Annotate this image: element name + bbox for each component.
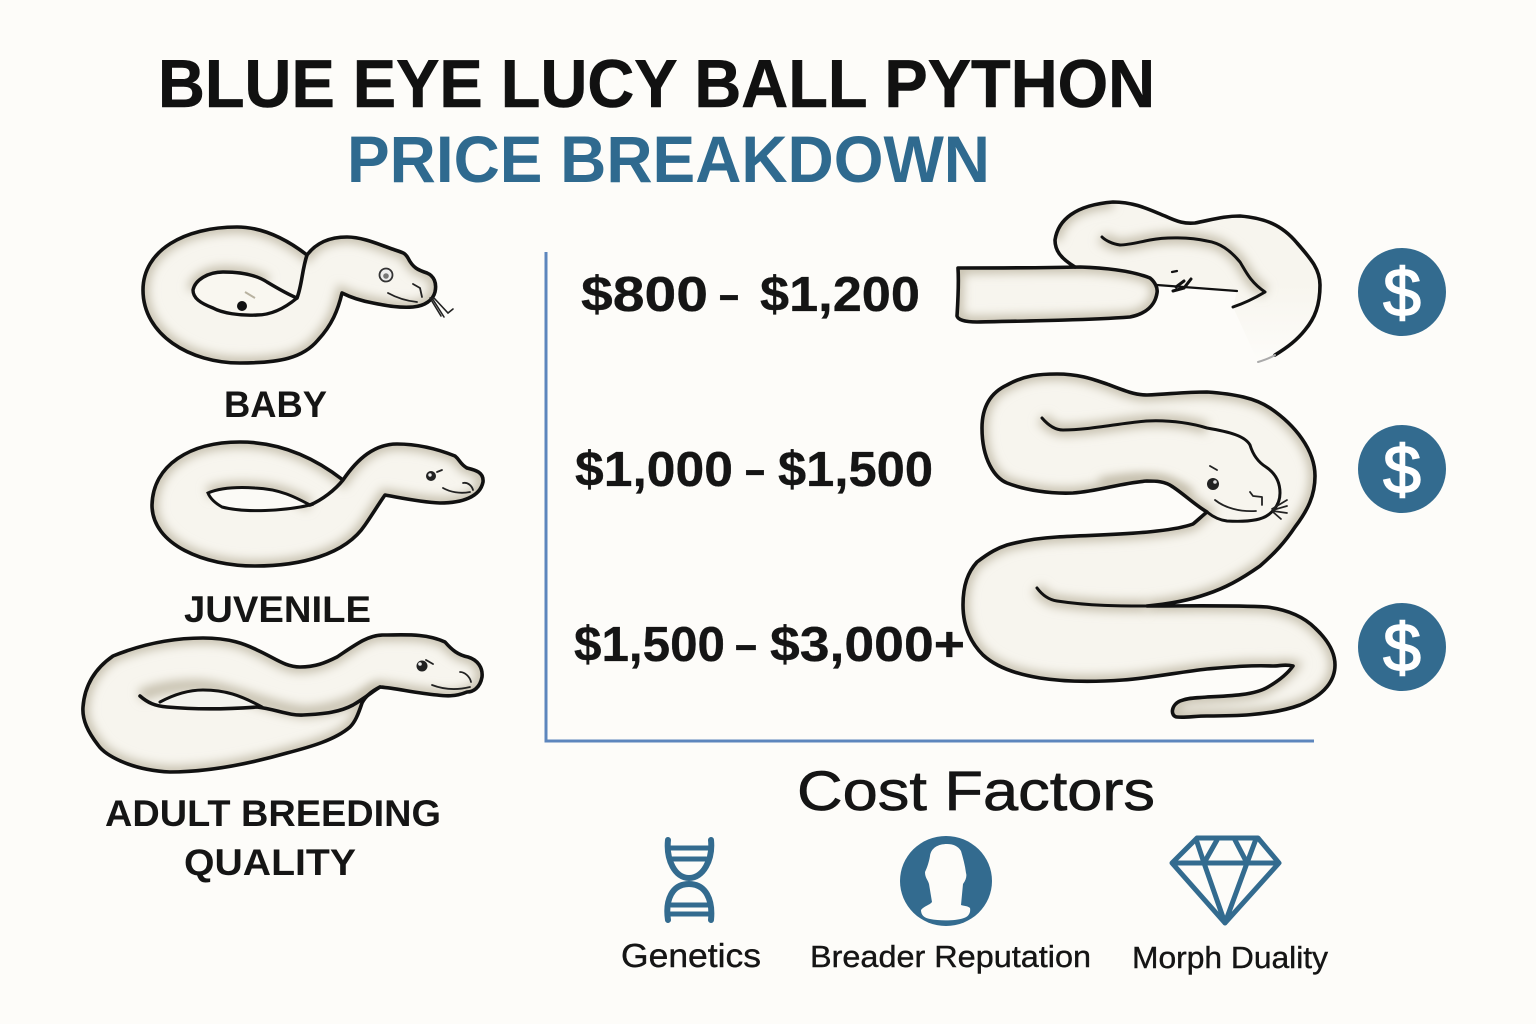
icon: dollar coin bottom	[1358, 603, 1446, 691]
snake: adult	[83, 635, 482, 772]
icon: dollar coin top: $	[1383, 255, 1421, 331]
icon: dollar coin middle: $	[1383, 432, 1421, 508]
title: BLUE EYE LUCY BALL PYTHON	[158, 46, 1155, 122]
snake: large right	[963, 374, 1335, 717]
price: adult: $1,500	[574, 618, 725, 672]
price: baby: –	[719, 268, 739, 322]
price: adult: –	[735, 618, 757, 672]
price: baby	[581, 268, 920, 322]
icon: breeder silhouette	[900, 836, 992, 926]
snake: juvenile	[152, 442, 483, 566]
label: genetics: Genetics	[621, 937, 761, 974]
snake hole	[160, 690, 262, 708]
label: adult breeding quality	[105, 793, 441, 883]
price: juvenile	[575, 443, 933, 497]
title: PRICE BREAKDOWN	[347, 122, 990, 196]
icon: dollar coin middle	[1358, 425, 1446, 513]
icon: dollar coin bottom: $	[1383, 610, 1421, 686]
price: baby: $1,200	[760, 268, 920, 322]
label: adult breeding quality: ADULT BREEDING	[105, 793, 441, 834]
title	[158, 46, 1155, 196]
price: adult	[574, 618, 965, 672]
label: adult breeding quality: QUALITY	[184, 842, 356, 883]
snake: top right	[957, 202, 1320, 362]
snake hole	[208, 488, 310, 511]
snake hole	[193, 272, 297, 315]
price: baby: $800	[581, 268, 708, 322]
label: breeder reputation: Breader Reputation	[810, 939, 1091, 974]
icon: dollar coin top	[1358, 248, 1446, 336]
icon: dna	[667, 840, 711, 920]
chart axes	[546, 252, 1314, 741]
label: baby: BABY	[224, 384, 327, 425]
heading: cost factors: Cost Factors	[797, 759, 1155, 822]
label: morph quality: Morph Duality	[1132, 940, 1328, 975]
price: adult: $3,000+	[770, 618, 965, 672]
price: juvenile: –	[745, 443, 765, 497]
price: juvenile: $1,500	[778, 443, 933, 497]
label: juvenile: JUVENILE	[184, 589, 371, 630]
price: juvenile: $1,000	[575, 443, 733, 497]
snake: baby	[143, 227, 453, 363]
icon: diamond	[1172, 838, 1279, 923]
